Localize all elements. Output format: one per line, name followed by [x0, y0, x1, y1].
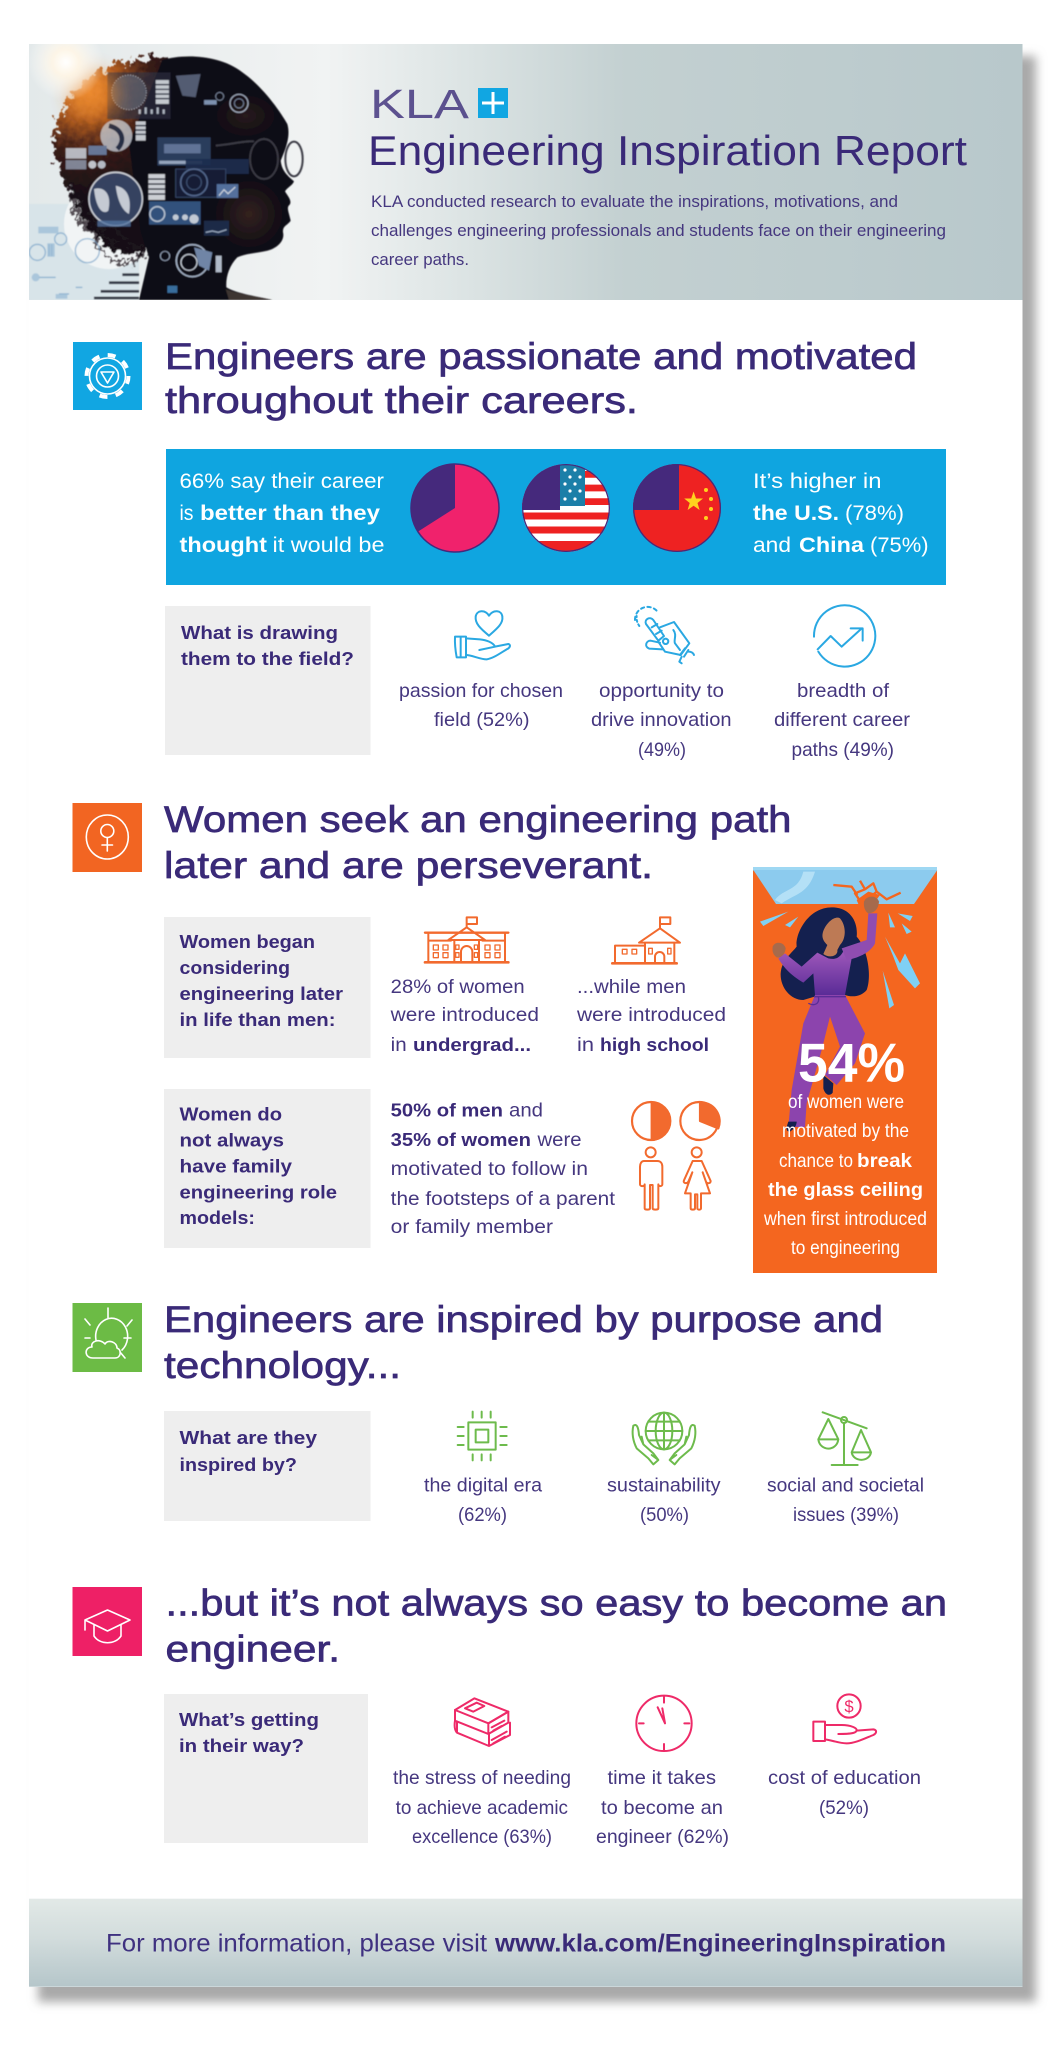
gray box: role models: not always [180, 1130, 284, 1151]
text: higher in US and China: and [753, 533, 791, 557]
gray box: what is drawing them: What is drawing [181, 622, 338, 643]
big number: 54% [798, 1032, 905, 1094]
gray box: role models: models: [180, 1207, 255, 1228]
stat: innovation: drive innovation [591, 709, 732, 731]
stat: family role models: the footsteps of a parent [391, 1188, 616, 1210]
panel text: the glass ceiling [768, 1179, 923, 1201]
stat: innovation: (49%) [638, 739, 686, 761]
stat: time: to become an [601, 1797, 723, 1819]
panel text: chance to [779, 1151, 853, 1172]
orange panel: 54% glass ceiling [753, 867, 937, 1273]
gray box: what's in the way [164, 1694, 368, 1843]
icon: high school [612, 917, 680, 963]
text: 66%: 66% say their career [180, 469, 384, 493]
stat: passion: passion for chosen [399, 680, 563, 702]
stat: women undergrad: undergrad... [413, 1034, 531, 1055]
gray box: what's in the way: What’s getting [179, 1709, 319, 1730]
heading [164, 799, 792, 886]
icon: robot hand [635, 607, 694, 663]
stat: social issues: social and societal [767, 1475, 924, 1497]
text: higher in US and China: China [799, 533, 865, 557]
stat: digital era: (62%) [458, 1504, 507, 1526]
heading: throughout their careers. [165, 380, 638, 421]
gray box: what is drawing them: them to the field? [181, 648, 354, 669]
text: 66%: is [180, 501, 194, 525]
heading [164, 1299, 883, 1386]
icon: female symbol [72, 803, 142, 872]
blue stat banner [166, 449, 946, 585]
gray box: what's in the way: in their way? [179, 1735, 304, 1756]
icon: graduation cap [72, 1587, 142, 1656]
gray box: began later: considering [180, 957, 290, 978]
stat: men high school: were introduced [576, 1004, 726, 1026]
stat: family role models: were [536, 1129, 582, 1151]
text: 66%: it would be [272, 533, 384, 557]
stat: men high school: ...while men [577, 976, 686, 998]
icon: university [425, 917, 508, 962]
text: 66% [180, 469, 384, 557]
photo: profile of woman with technology overlay [27, 24, 303, 300]
stat: career paths: different career [774, 709, 911, 731]
icon: gear [73, 342, 142, 410]
pie: 66% [411, 464, 499, 552]
panel text: of women were [788, 1092, 904, 1113]
text: higher in US and China: (78%) [845, 501, 904, 525]
stat: academic stress: to achieve academic [396, 1797, 568, 1819]
stat: digital era [424, 1475, 542, 1526]
gray box: role models [164, 1089, 370, 1248]
gray box: what inspires: What are they [180, 1427, 318, 1448]
section 3: inspired [72, 1299, 924, 1526]
section 4: obstacles [72, 1583, 947, 1848]
stat: passion [399, 680, 563, 731]
stat: career paths: breadth of [797, 680, 890, 702]
stat: career paths [774, 680, 911, 761]
intro text [371, 192, 946, 269]
stat: time: time it takes [608, 1767, 716, 1789]
text: higher in US and China: It’s higher in [753, 469, 882, 493]
gray box: what inspires: inspired by? [180, 1454, 297, 1475]
footer band [29, 1899, 1022, 1987]
stat: sustainability [607, 1475, 721, 1526]
icon: man [640, 1147, 662, 1210]
gray box: began later: engineering later [180, 983, 343, 1004]
pie: women 35% [680, 1102, 720, 1140]
gray box: role models: have family [180, 1156, 293, 1177]
icon: coin above hand: $ [844, 1697, 854, 1716]
stat: innovation [591, 680, 732, 761]
stat: women undergrad: 28% of women [391, 976, 525, 998]
icon: balance scale [818, 1412, 871, 1465]
gray box: what is drawing them [165, 606, 370, 755]
stat: sustainability: sustainability [607, 1475, 721, 1497]
section 1: passionate engineers [73, 336, 946, 761]
illustration: woman breaking glass ceiling [753, 870, 937, 1132]
stat: cost [768, 1767, 921, 1819]
icon: chip [458, 1412, 507, 1460]
stat: family role models [391, 1100, 616, 1238]
heading: later and are perseverant. [164, 845, 653, 886]
stat: men high school: in [577, 1034, 594, 1056]
tech overlays [29, 72, 249, 299]
gray box: began later [164, 917, 370, 1058]
panel text [763, 1092, 927, 1259]
stat: family role models: 50% of men [391, 1100, 503, 1121]
header banner [27, 24, 1022, 300]
pie: China flag 75% [633, 464, 721, 552]
heading: Engineers are passionate and motivated [165, 336, 917, 377]
icon: clock [636, 1696, 692, 1751]
stat: cost: cost of education [768, 1767, 921, 1789]
stat: women undergrad: were introduced [390, 1004, 539, 1026]
gray box: what inspires [164, 1411, 370, 1521]
text: higher in US and China [753, 469, 929, 557]
KLA logo [370, 81, 508, 127]
stat: family role models: 35% of women [391, 1129, 531, 1150]
stat: social issues: issues (39%) [793, 1504, 899, 1526]
icon: globe in hands [633, 1413, 695, 1464]
text: higher in US and China: the U.S. [753, 501, 839, 525]
stat: family role models: and [509, 1100, 543, 1122]
text: 66%: better than they [200, 501, 380, 525]
footer band: For more information, please visit [106, 1930, 487, 1958]
sun flare [69, 71, 116, 117]
pie: U.S. flag 78% [522, 464, 610, 552]
glasses [216, 139, 303, 179]
heading: ...but it’s not always so easy to become an [166, 1583, 947, 1624]
stat: career paths: paths (49%) [792, 739, 894, 761]
icon: stack of books [455, 1698, 510, 1746]
icon: sun and cloud [72, 1303, 142, 1372]
intro text: career paths. [371, 250, 469, 269]
stat: family role models: motivated to follow in [391, 1158, 588, 1180]
panel text: motivated by the [782, 1121, 909, 1142]
stat: passion: field (52%) [434, 709, 530, 731]
heading [166, 1583, 947, 1670]
icon: woman [684, 1147, 711, 1210]
stat: time: engineer (62%) [596, 1826, 729, 1848]
report title: Engineering Inspiration Report [368, 127, 967, 174]
stat: cost: (52%) [819, 1797, 869, 1819]
pies and people icons [632, 1102, 720, 1210]
gray box: began later: Women began [180, 931, 315, 952]
intro text: challenges engineering professionals and students face on their engineering [371, 221, 946, 240]
text: 66%: thought [180, 533, 267, 557]
section 2: women [72, 799, 937, 1273]
gray box: role models: engineering role [180, 1182, 337, 1202]
intro text: KLA conducted research to evaluate the inspirations, motivations, and [371, 192, 898, 211]
stat: family role models: or family member [391, 1216, 554, 1238]
panel text: to engineering [791, 1238, 900, 1259]
gray box: role models: Women do [180, 1104, 282, 1125]
stat: men high school [576, 976, 726, 1056]
stat: academic stress [393, 1767, 571, 1848]
stat: sustainability: (50%) [640, 1504, 689, 1526]
heading: Engineers are inspired by purpose and [164, 1299, 883, 1340]
text: higher in US and China: (75%) [870, 533, 929, 557]
heading: technology... [164, 1345, 401, 1386]
stat: social issues [767, 1475, 924, 1526]
stat: academic stress: excellence (63%) [412, 1826, 552, 1848]
stat: men high school: high school [600, 1034, 709, 1055]
stat: time [596, 1767, 729, 1848]
icon: heart in hand [455, 611, 510, 659]
stat: innovation: opportunity to [599, 680, 724, 702]
gray box: began later: in life than men: [180, 1009, 336, 1030]
heading: engineer. [166, 1629, 340, 1670]
pie: men 50% [632, 1102, 670, 1140]
stat: digital era: the digital era [424, 1475, 542, 1497]
panel text: break [857, 1150, 912, 1172]
KLA logo: KLA [370, 81, 470, 127]
heading [165, 336, 917, 421]
icon: coin above hand [813, 1694, 876, 1743]
stat: academic stress: the stress of needing [393, 1767, 571, 1789]
panel text: when first introduced [763, 1209, 927, 1230]
stat: women undergrad [390, 976, 539, 1056]
icon: growth chart [814, 605, 875, 667]
footer band: www.kla.com/EngineeringInspiration [494, 1930, 946, 1958]
heading: Women seek an engineering path [164, 799, 792, 840]
stat: women undergrad: in [391, 1034, 407, 1056]
